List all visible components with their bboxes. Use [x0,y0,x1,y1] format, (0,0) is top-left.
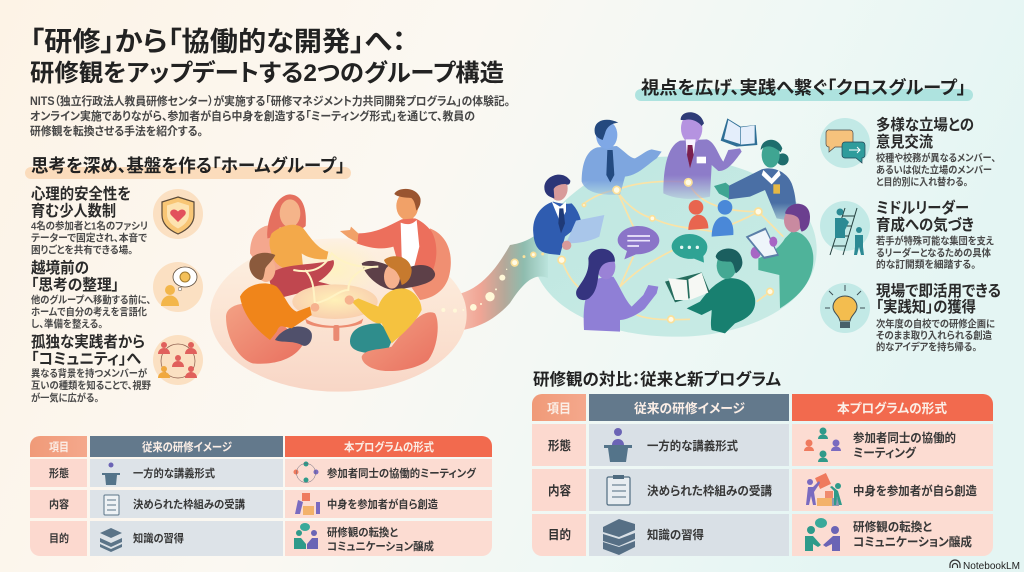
row: purpose: 研修観の転換と [327,525,398,539]
header row: 従来の研修イメージ [142,440,233,454]
row: purpose [30,521,492,556]
person: man with book [665,249,755,333]
network lines [562,181,783,320]
person: red [689,200,703,215]
row: form: 形態 [548,438,571,453]
light threads [293,253,378,303]
row: content: 内容 [49,497,69,511]
item: small group safety [31,184,148,256]
item: small group safety: 心理的安全性を [31,184,131,203]
item: middle leader: ミドルリーダー [876,198,969,217]
item: middle leader: 育成への気づき [876,215,974,234]
item: practical knowledge: 「実践知」の獲得 [876,297,976,316]
speech bubble green [672,234,707,263]
item: diverse exchange: 意見交流 [876,133,933,151]
table: left comparison [30,436,492,556]
item: organising thoughts: し、準備を整える。 [31,318,103,330]
item: organising thoughts: ホームで自分の考えを言語化 [31,306,147,318]
person: woman purple front [576,249,658,332]
illustration: home group circle [210,189,507,392]
header row: 項目 [49,441,69,454]
row: content [30,490,492,518]
item: practical knowledge: 次年度の自校での研修企画に [876,318,995,330]
chair: back right [407,228,451,300]
header row: 項目 [547,401,571,416]
row: purpose: 知識の習得 [647,527,704,542]
person: man front left [226,253,319,364]
header row [532,394,993,421]
row: purpose: 研修観の転換と [853,519,932,534]
row: form [30,459,492,487]
intro text: オンライン実施でありながら、参加者が自ら中身を創造する「ミーティング形式」を通じて、教員の [30,109,475,123]
item: diverse exchange: 校種や校務が異なるメンバー、 [876,152,996,164]
heading: home group: 思考を深め、基盤を作る「ホームグループ」 [31,155,345,176]
row: content: 決められた枠組みの受講 [133,497,245,511]
row: content: 決められた枠組みの受講 [647,483,772,498]
item: small group safety: 4名の参加者と1名のファシリ [31,220,148,232]
person: blue shirt man [582,120,662,195]
header row: 本プログラムの形式 [344,440,434,454]
item: organising thoughts: 他のグループへ移動する前に、 [31,294,151,306]
title: 「研修」から「協働的な開発」へ： [30,27,406,57]
item: community: が一気に広がる。 [31,392,99,404]
intro text [30,94,510,138]
row: purpose: 知識の習得 [133,531,184,545]
icon: shield heart [153,189,203,239]
row: content: 内容 [548,483,571,498]
item: middle leader: るリーダーとなるための具体 [876,246,991,260]
item: practical knowledge: 現場で即活用できる [876,282,1001,300]
item: community: 異なる背景を持つメンバーが [31,367,147,380]
item: small group safety: 育む少人数制 [31,202,116,220]
person: woman with tablet [746,204,813,308]
table [292,284,378,341]
person: man back right [340,189,436,290]
item: community [31,333,151,404]
icon: network of people [153,335,203,385]
row: purpose: コミュニケーション醸成 [853,534,972,549]
illustration: cross group network [511,112,813,333]
row: form: 一方的な講義形式 [647,438,738,453]
row: form: 形態 [49,466,69,480]
item: small group safety: テーターで固定され、本音で [31,232,147,244]
item: organising thoughts [31,258,151,330]
icon: light bulb [820,283,870,333]
row: form: 参加者同士の協働的ミーティング [327,466,477,480]
row: purpose [532,514,993,556]
icon: ladder helpers [820,201,870,255]
item: community: 孤独な実践者から [31,333,145,351]
icon: person thinking [153,262,203,312]
item: middle leader: 若手が特殊可能な集団を支え [876,234,994,248]
person: blue [718,200,732,215]
person: teal woman [714,140,796,222]
item: community: 「コミュニティ」へ [31,350,141,368]
item: middle leader [876,198,994,271]
item: diverse exchange: あるいは似た立場のメンバー [876,164,992,176]
row: form: 一方的な講義形式 [133,466,215,480]
item: practical knowledge: そのまま取り入れられる創造 [876,329,992,342]
network nodes [511,179,773,323]
heading: contrast table: 研修観の対比：従来と新プログラム [533,369,781,389]
item: diverse exchange: 多様な立場との [876,115,974,134]
table: right comparison [532,394,993,556]
illustration: cross group blob [533,157,817,337]
row: form: ミーティング [853,445,917,460]
person: woman front right [345,256,438,371]
item: middle leader: 的な訂開類を細踏する。 [876,258,976,271]
item: practical knowledge: 的なアイデアを持ち帰る。 [876,340,977,354]
item: diverse exchange [876,115,996,188]
item: organising thoughts: 越境前の [31,258,89,277]
icon: chat bubbles [820,118,870,168]
row: purpose: 目的 [49,531,69,545]
intro text: NITS（独立行政法人教員研修センター）が実施する「研修マネジメント力共同開発プログラム」の体験記。 [30,94,510,108]
row: form: 参加者同士の協働的 [853,430,956,445]
row: form [532,424,993,466]
person: laptop man [533,175,604,255]
logo: NotebookLM: NotebookLM [963,560,1020,572]
row: content: 中身を参加者が自ら創造 [327,497,438,511]
item: small group safety: 困りごとを共有できる場。 [31,244,133,256]
heading: cross group: 視点を広げ、実践へ繋ぐ「クロスグループ」 [641,77,966,98]
illustration: connecting ribbon [430,225,548,331]
header row: 本プログラムの形式 [837,401,947,416]
speech bubble purple [618,226,659,259]
item: community: 互いの種類を知ることで、視野 [31,379,151,392]
person: purple man with book [663,112,757,199]
intro text: 研修観を転換させる手法を紹介する。 [30,124,203,138]
chair: back left [250,225,293,278]
row: content: 中身を参加者が自ら創造 [853,483,977,498]
person: woman back left [267,194,334,298]
header row [30,436,492,457]
row: content [532,469,993,511]
item: practical knowledge [876,282,1001,354]
item: organising thoughts: 「思考の整理」 [31,276,119,294]
title: 研修観をアップデートする2つのグループ構造 [30,59,504,87]
ribbon lights [441,269,507,313]
row: purpose: 目的 [548,527,571,542]
header row: 従来の研修イメージ [634,401,745,416]
row: purpose: コミュニケーション醸成 [327,539,434,553]
item: diverse exchange: と目的別に入れ替わる。 [876,176,968,188]
title [30,27,504,87]
